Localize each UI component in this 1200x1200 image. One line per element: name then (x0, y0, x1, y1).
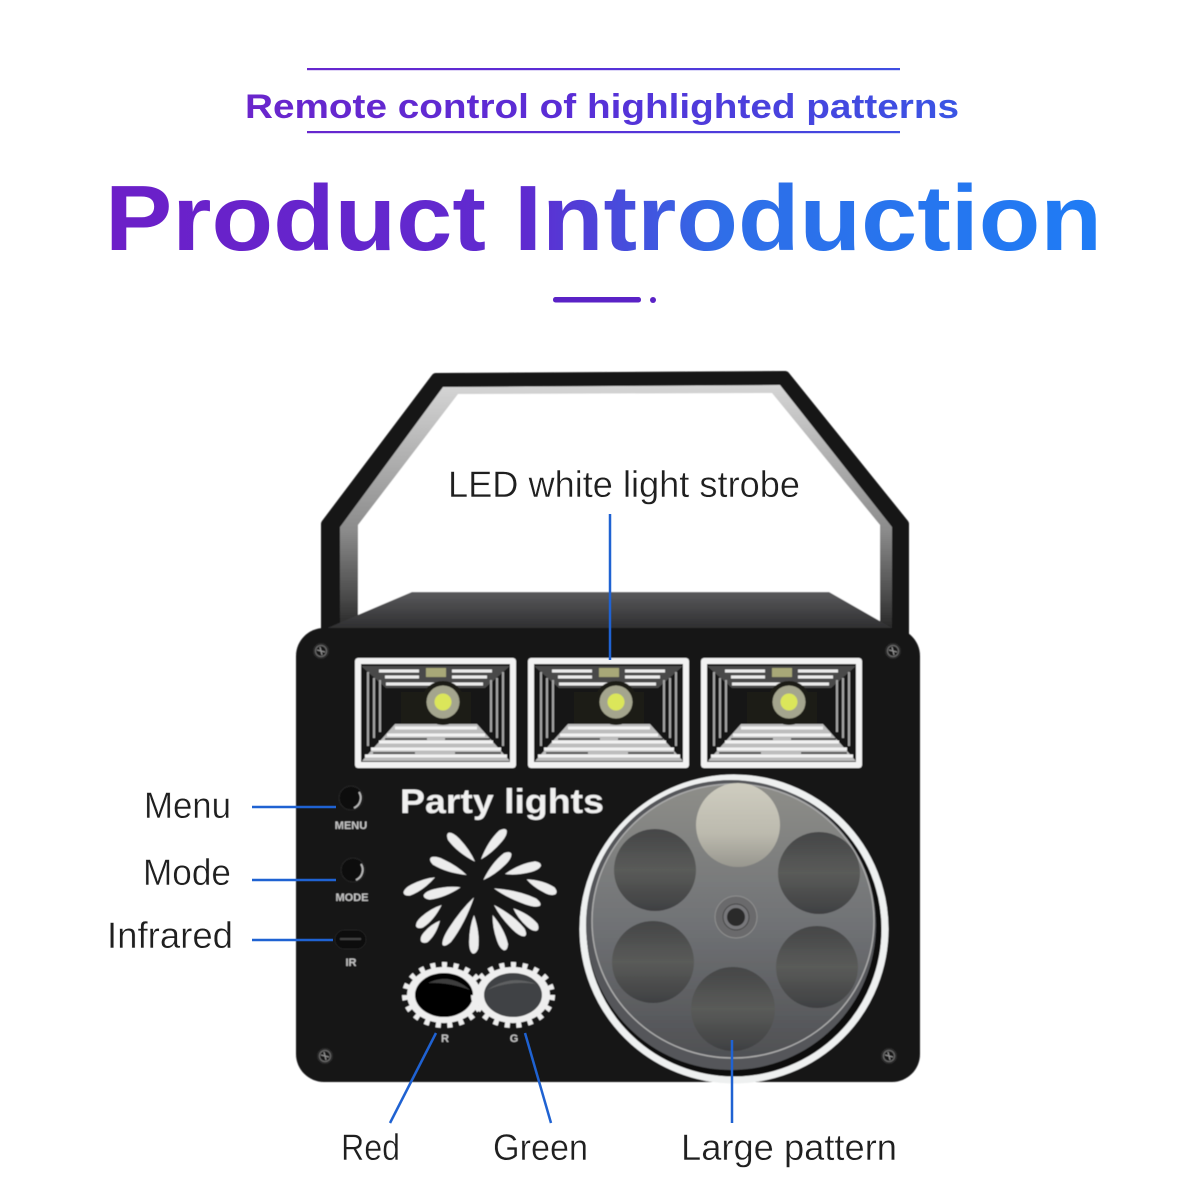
handle (326, 376, 904, 650)
infrared sensor: IR (346, 957, 357, 969)
mode button (336, 858, 368, 904)
callout: Menu: Menu (144, 785, 231, 826)
subtitle: Remote control of highlighted patterns (245, 88, 959, 126)
green laser gear aperture: G (510, 1033, 518, 1045)
lens group (612, 829, 860, 1051)
top surface of housing (318, 592, 892, 632)
firework icon (402, 826, 558, 954)
lens: bright top (696, 783, 780, 867)
subtitle underline (307, 131, 900, 133)
callout: Red: Red (341, 1127, 400, 1168)
menu button (335, 786, 367, 832)
mode button: MODE (336, 892, 368, 904)
top rule (307, 68, 900, 70)
callout: Red (341, 1033, 436, 1168)
strobe windows (355, 658, 862, 768)
red laser gear aperture (405, 965, 483, 1045)
callout: Green: Green (493, 1127, 588, 1168)
menu button: MENU (335, 820, 367, 832)
red laser gear aperture: R (441, 1033, 449, 1045)
title accent dash (553, 297, 656, 303)
housing front panel (296, 628, 920, 1082)
large pattern lens disc (583, 778, 885, 1080)
callout: Green (493, 1033, 588, 1168)
screws (313, 643, 901, 1064)
callout: LED white light strobe: LED white light strobe (448, 464, 800, 505)
callout: Large pattern: Large pattern (681, 1127, 897, 1168)
callout: Infrared: Infrared (107, 915, 233, 956)
centre hub (715, 896, 757, 938)
callout: Mode: Mode (143, 852, 231, 893)
product: party light (296, 376, 920, 1082)
title: Product Introduction (105, 166, 1102, 270)
brand text: Party lights (400, 783, 604, 821)
green laser gear aperture (474, 965, 552, 1045)
infrared sensor (335, 930, 366, 969)
